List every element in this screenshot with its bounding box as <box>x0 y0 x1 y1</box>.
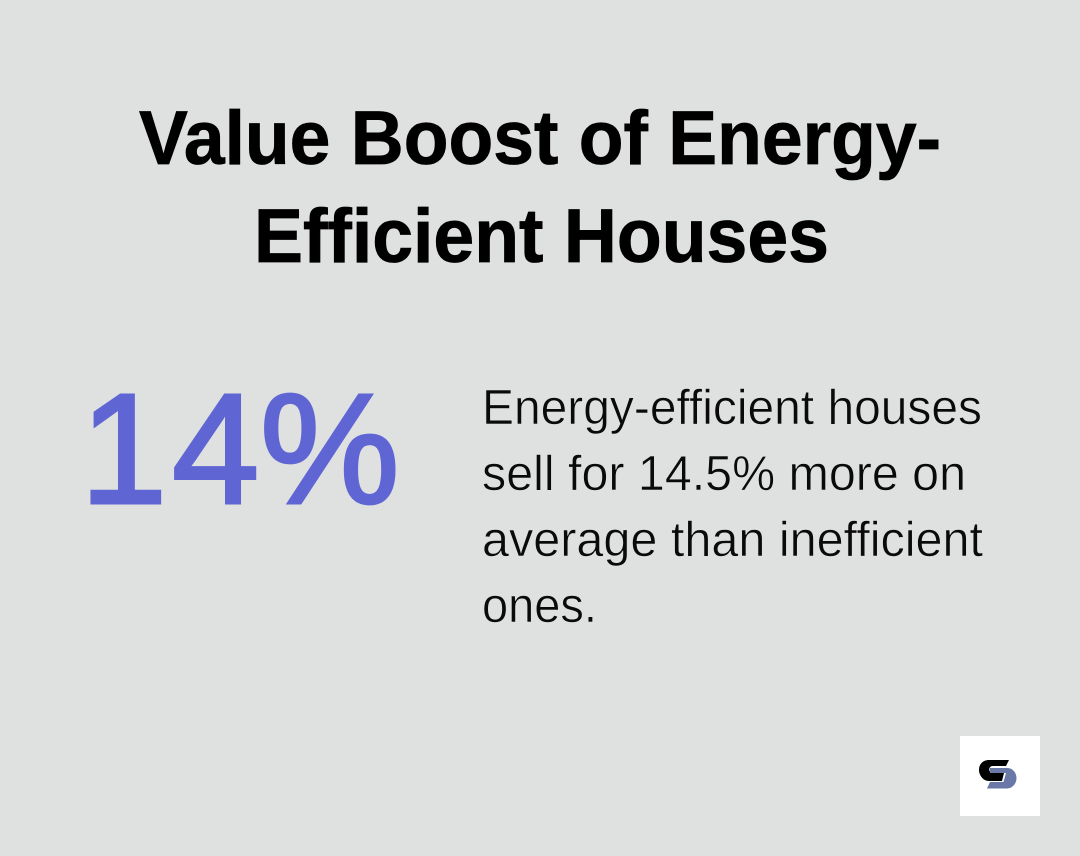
description text <box>482 381 983 633</box>
description text: sell for 14.5% more on <box>482 447 966 501</box>
logo badge <box>960 736 1040 816</box>
icon: logo upper part <box>979 760 1009 781</box>
title: Value Boost of Energy- <box>139 96 941 181</box>
big stat: 14%: 14% <box>80 362 400 537</box>
description text: Energy-efficient houses <box>482 381 982 435</box>
title: Efficient Houses <box>254 194 829 279</box>
description text: average than inefficient <box>482 513 983 567</box>
title <box>139 96 941 279</box>
description text: ones. <box>482 579 597 633</box>
icon: logo lower part <box>987 768 1016 788</box>
